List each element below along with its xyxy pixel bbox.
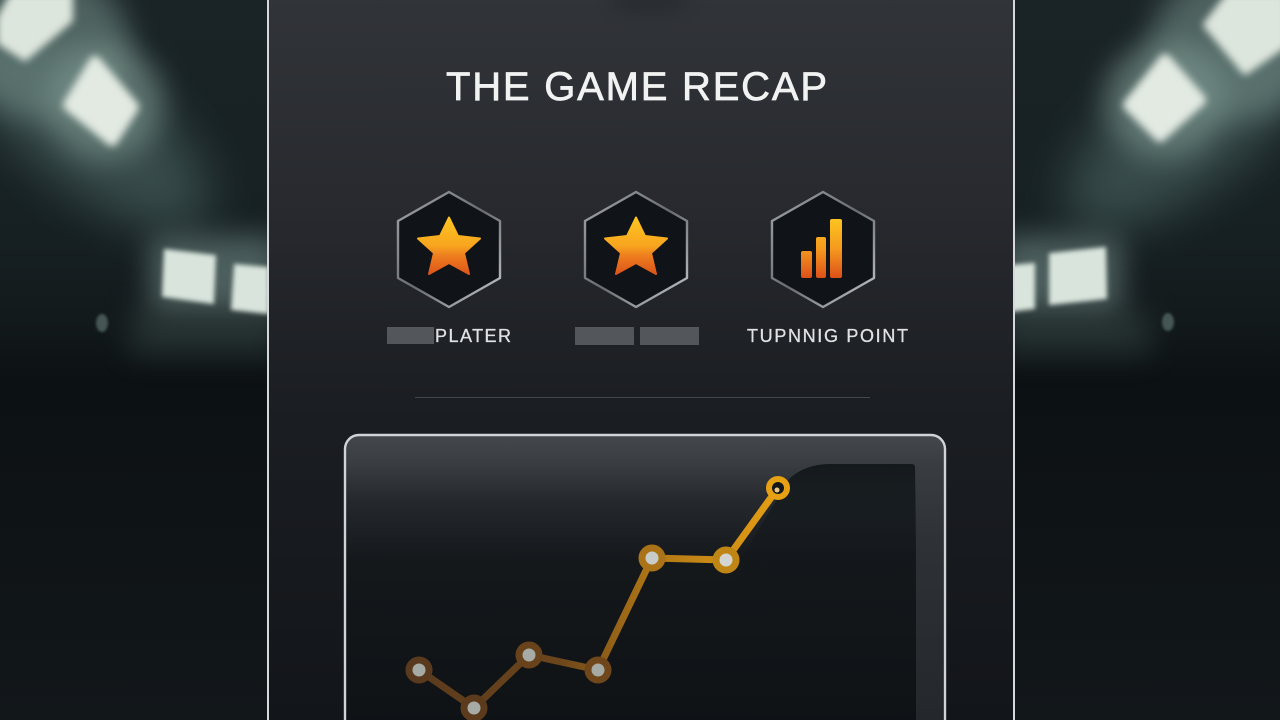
chart panel [345,435,945,720]
central panel [268,0,1014,720]
stat: turning point [747,192,908,346]
stat: second star [575,192,699,345]
icon: bar chart hexagon [772,192,874,307]
line chart [409,479,787,718]
redacted label block [387,327,434,344]
label: turning point: TUPNNIG POINT [747,326,908,346]
label: player: PLATER [435,326,511,346]
icon: star hexagon [585,192,687,307]
data point markers [409,479,787,718]
chart inner area [740,464,915,720]
right floodlights [1000,0,1280,355]
icon: star hexagon [398,192,500,307]
title: THE GAME RECAP [446,65,827,109]
redacted label blocks [575,327,699,345]
left floodlights [0,0,280,355]
stat: player [387,192,511,346]
